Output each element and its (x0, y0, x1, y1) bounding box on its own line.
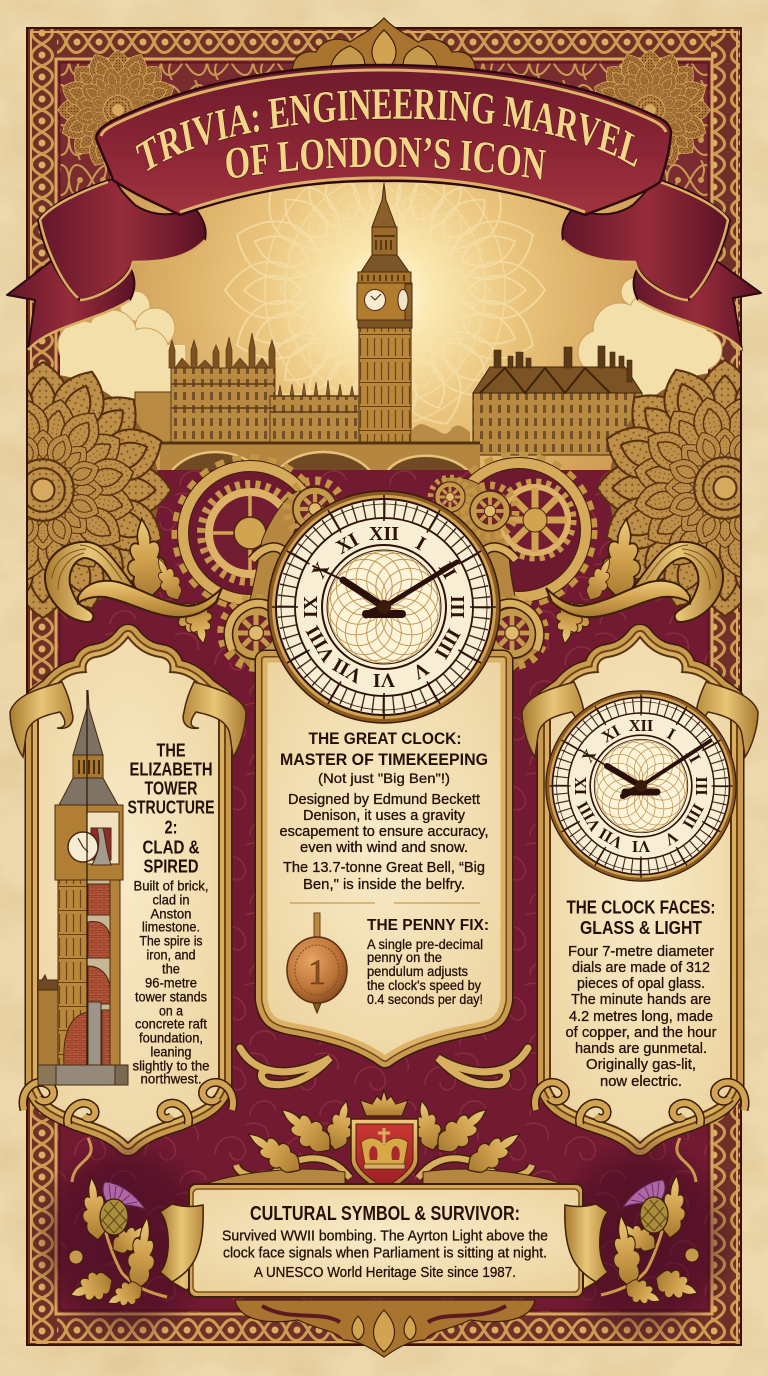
body: elizabeth tower: concrete raft (135, 1016, 207, 1032)
crown and shield crest (205, 1090, 563, 1194)
body: great clock: escapement to ensure accuracy, (280, 824, 488, 840)
gold ribbon right (546, 517, 723, 646)
body: clock faces: pieces of opal glass. (577, 976, 705, 992)
body: clock faces (566, 944, 717, 1090)
panel: clock faces (522, 637, 758, 1143)
bottom centre ornament (235, 1300, 535, 1357)
clock face illustration (546, 691, 736, 881)
right ribbon tail (562, 178, 761, 350)
clock dial: XI (332, 529, 363, 559)
large left gear (175, 458, 325, 608)
clock dial: III (446, 595, 468, 619)
body: penny fix (367, 937, 483, 1007)
heading: elizabeth tower: SPIRED (144, 856, 198, 876)
title text: TRIVIA: ENGINEERING MARVEL (135, 88, 638, 172)
gear assembly (175, 455, 594, 690)
clock face illustration: II (682, 746, 705, 766)
title banner (6, 64, 762, 351)
body: elizabeth tower: slightly to the (132, 1058, 210, 1074)
ornate upper lace field (60, 63, 708, 233)
lower small gears (222, 599, 544, 667)
gold ribbon left (45, 517, 222, 646)
sun mandala halo (89, 22, 681, 558)
heading: elizabeth tower: 2: (164, 818, 178, 838)
clock face illustration: X (577, 746, 600, 766)
skyline scene (58, 22, 722, 558)
clock face illustration: V (661, 827, 681, 850)
body: clock faces: The minute hands are (571, 992, 711, 1008)
body: penny fix: pendulum adjusts (367, 964, 468, 979)
body: elizabeth tower: Built of brick, (134, 878, 208, 894)
clock dial: VIII (302, 621, 340, 665)
dark corner shading near thistles (30, 1135, 738, 1345)
body: great clock: even with wind and snow. (300, 840, 468, 856)
heading: great clock: THE GREAT CLOCK: (308, 729, 462, 748)
body: elizabeth tower: tower stands (135, 990, 207, 1004)
body: elizabeth tower: iron, and (146, 948, 196, 962)
top centre lotus ornament (292, 18, 476, 74)
oak leaf sprays (205, 1098, 563, 1184)
Elizabeth Tower (357, 183, 412, 450)
heading: elizabeth tower: TOWER (144, 778, 198, 798)
icon: penny pendulum: 1 (308, 952, 326, 992)
heading: great clock: MASTER OF TIMEKEEPING (280, 750, 488, 769)
heading: great clock (280, 729, 488, 769)
left ribbon tail (7, 178, 206, 350)
shield (351, 1119, 418, 1194)
burgundy backing behind gears (100, 470, 670, 1150)
body: elizabeth tower: northwest. (140, 1072, 202, 1086)
body: clock faces: of copper, and the hour (566, 1025, 717, 1041)
inner right gear (497, 482, 573, 558)
clock face illustration: VI (632, 837, 650, 856)
body: clock faces: 4.2 metres long, made (569, 1009, 713, 1025)
panel: cultural symbol and survivor (160, 1184, 608, 1297)
heading: elizabeth tower: STRUCTURE (128, 798, 214, 818)
heading: clock faces: THE CLOCK FACES: (566, 898, 716, 918)
trees (412, 424, 470, 450)
body: clock faces: Four 7-metre diameter (568, 944, 714, 960)
clock dial (268, 491, 500, 723)
river bridge (160, 443, 480, 473)
large right gear (444, 455, 594, 605)
thistle left (66, 1176, 167, 1314)
clock dial: IIII (430, 625, 465, 663)
body: cultural symbol (222, 1228, 548, 1281)
body: great clock: The 13.7-tonne Great Bell, “Big (283, 860, 485, 876)
scrollwork beside clock (228, 547, 540, 650)
body: penny fix: the clock's speed by (367, 978, 481, 993)
body: elizabeth tower: Anston (150, 906, 192, 922)
clock dial: VII (329, 653, 366, 687)
heading: penny fix: THE PENNY FIX: (367, 917, 489, 934)
clock face illustration: I (664, 724, 679, 743)
clock face illustration: III (692, 776, 711, 796)
clock face illustration: IIII (679, 800, 708, 832)
clock dial: I (412, 532, 430, 555)
body: great clock: Designed by Edmund Beckett (288, 792, 480, 808)
clock dial: VI (373, 669, 395, 691)
body: cultural symbol: clock face signals when Parliament is sitting at night. (223, 1244, 547, 1262)
panel: the great clock (265, 491, 503, 1058)
Portcullis House (473, 346, 642, 455)
body: elizabeth tower: the (162, 962, 180, 976)
body: clock faces: dials are made of 312 (572, 960, 710, 976)
body: elizabeth tower (132, 878, 210, 1086)
body: elizabeth tower: foundation, (139, 1030, 203, 1046)
top corner mandalas (7, 0, 761, 221)
heading: clock faces: GLASS & LIGHT (580, 918, 702, 938)
clock dial: II (434, 558, 461, 583)
clouds (58, 278, 722, 376)
clock face illustration: VIII (573, 798, 605, 834)
clock face illustration: XI (598, 721, 623, 746)
scroll ends (160, 1204, 608, 1290)
clock dial: XII (369, 523, 399, 545)
heading: elizabeth tower: THE (156, 740, 186, 760)
title text: OF LONDON’S ICON (226, 136, 547, 180)
scrollwork beneath centre panel (240, 1048, 528, 1085)
body: elizabeth tower: limestone. (142, 920, 200, 934)
heading: clock faces (566, 898, 716, 938)
heading: elizabeth tower: CLAD & (142, 838, 200, 858)
clock dial: X (308, 558, 334, 582)
body: penny fix: penny on the (367, 950, 442, 965)
body: elizabeth tower: 96-metre (145, 976, 197, 990)
panel: elizabeth tower structure (10, 637, 246, 1143)
body: great clock: Ben," is inside the belfry. (303, 877, 465, 893)
clock face illustration: VII (595, 824, 626, 853)
body: elizabeth tower: on a (159, 1004, 183, 1018)
thistle right (601, 1174, 702, 1312)
icon: penny pendulum (287, 913, 347, 1013)
body: elizabeth tower: leaning (150, 1044, 192, 1060)
body: clock faces: now electric. (600, 1074, 682, 1090)
gold filler around clock (232, 477, 540, 690)
body: great clock: Denison, it uses a gravity (303, 808, 466, 824)
cutaway tower illustration (38, 690, 128, 1085)
heading: elizabeth tower (128, 740, 214, 876)
heading: cultural symbol: CULTURAL SYMBOL & SURVIVOR: (250, 1203, 520, 1225)
clock face illustration: XII (629, 716, 653, 735)
body: elizabeth tower: clad in (152, 892, 190, 908)
body: clock faces: hands are gunmetal. (575, 1041, 707, 1057)
subtitle: (Not just "Big Ben"!) (318, 770, 450, 786)
small corner curls (72, 1138, 696, 1182)
clock face illustration: IX (571, 777, 590, 795)
body: cultural symbol: Survived WWII bombing. The Ayrton Light above the (222, 1228, 548, 1244)
body: elizabeth tower: The spire is (140, 934, 203, 948)
top small gears (287, 478, 516, 537)
main ribbon (96, 65, 671, 215)
body: penny fix: 0.4 seconds per day! (367, 992, 483, 1007)
Parliament (135, 333, 362, 448)
clock dial: IX (300, 595, 322, 618)
body: clock faces: Originally gas-lit, (586, 1057, 696, 1073)
lower mandalas (28, 359, 740, 619)
heading: elizabeth tower: ELIZABETH (130, 760, 212, 780)
crown (360, 1090, 408, 1116)
body: great clock (280, 792, 488, 893)
body: penny fix: A single pre-decimal (367, 937, 483, 952)
body: cultural symbol: A UNESCO World Heritage Site since 1987. (254, 1264, 516, 1281)
clock dial: V (408, 657, 432, 684)
